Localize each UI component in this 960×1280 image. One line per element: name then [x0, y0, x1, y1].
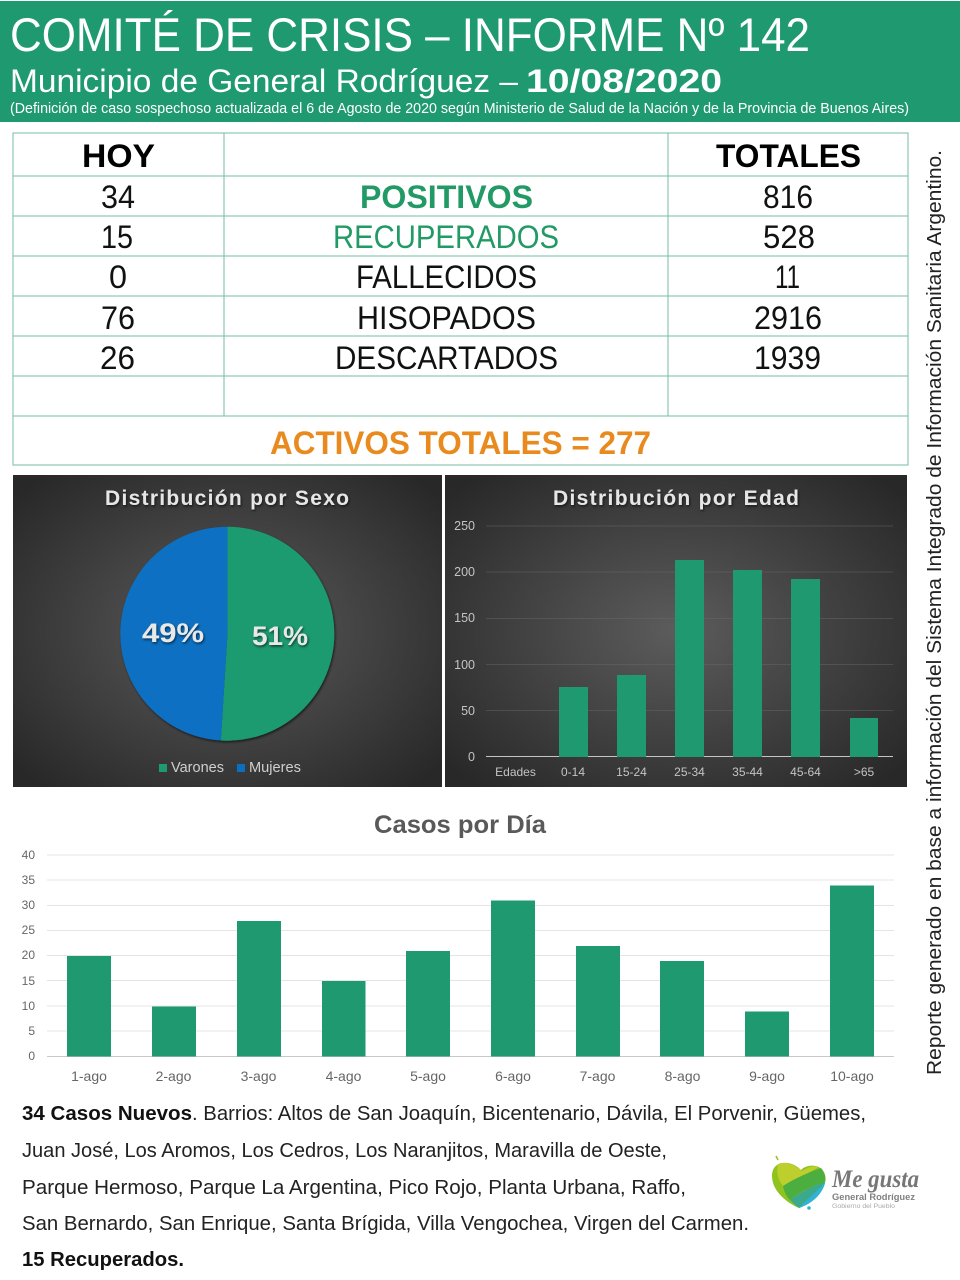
- bar chart: age: [454, 519, 893, 779]
- bar chart: daily cases: 2-ago: [156, 1068, 192, 1084]
- bar chart: daily cases: 4-ago: [326, 1068, 362, 1084]
- legend: Varones: [171, 760, 224, 776]
- bar chart: daily cases: 30: [22, 898, 35, 912]
- icon: heart: [772, 1156, 826, 1210]
- bar chart: age: 250: [454, 519, 475, 533]
- bar chart: daily cases: 40: [22, 848, 35, 862]
- pie chart: [120, 527, 334, 741]
- bar chart: age: >65: [854, 765, 875, 779]
- logo tagline: Gobierno del Pueblo: [832, 1204, 896, 1210]
- legend: Mujeres: [249, 760, 301, 776]
- summary table: [13, 133, 908, 465]
- row: descartados: 1939: [754, 340, 821, 376]
- bar chart: age: Edades: [495, 765, 536, 779]
- neighbourhoods text block: San Bernardo, San Enrique, Santa Brígida, Villa Vengochea, Virgen del Carmen.: [22, 1212, 749, 1235]
- row: positivos: 34: [101, 179, 135, 215]
- bar chart: daily cases: 9-ago: [749, 1068, 785, 1084]
- bar chart: daily cases: 10-ago: [830, 1068, 874, 1084]
- legend: [159, 760, 301, 776]
- row: hisopados: [101, 300, 822, 336]
- row: recuperados: RECUPERADOS: [333, 219, 559, 255]
- panel: distribution by sex: [13, 475, 442, 787]
- row: recuperados: 528: [763, 219, 815, 255]
- row: fallecidos: 11: [775, 259, 800, 295]
- heading: Distribución por Edad: [553, 487, 799, 510]
- heading: Distribución por Sexo: [105, 487, 349, 510]
- logo: Me gusta General Rodríguez: [772, 1156, 919, 1210]
- bar chart: age: 150: [454, 611, 475, 625]
- row: positivos: POSITIVOS: [360, 179, 533, 215]
- heading: Casos por Día: [374, 811, 547, 839]
- bar chart: age: 0: [468, 750, 475, 764]
- row: positivos: [101, 179, 813, 215]
- panel: cases per day: [22, 811, 894, 1084]
- bar chart: age: 100: [454, 658, 475, 672]
- bar chart: daily cases: 5-ago: [410, 1068, 446, 1084]
- header banner: [0, 1, 960, 122]
- report date: 10/08/2020: [526, 63, 722, 99]
- bar chart: daily cases: 3-ago: [241, 1068, 277, 1084]
- bar chart: daily cases: 7-ago: [580, 1068, 616, 1084]
- row: fallecidos: [109, 259, 800, 295]
- row: descartados: DESCARTADOS: [335, 340, 558, 376]
- neighbourhoods text block: Parque Hermoso, Parque La Argentina, Pico Rojo, Planta Urbana, Raffo,: [22, 1176, 686, 1199]
- row: fallecidos: 0: [109, 259, 127, 295]
- source note rotated: Reporte generado en base a información del Sistema Integrado de Información Sanitaria Argentino.: [924, 150, 946, 1075]
- bar chart: daily cases: 10: [22, 999, 35, 1013]
- bar chart: daily cases: [22, 848, 894, 1084]
- bar chart: age: 25-34: [674, 765, 705, 779]
- bar chart: age: 15-24: [616, 765, 647, 779]
- row: positivos: 816: [763, 179, 813, 215]
- bar chart: daily cases: 25: [22, 923, 35, 937]
- label: mujeres share: 49%: [142, 618, 204, 648]
- bar chart: daily cases: 20: [22, 948, 35, 962]
- bar chart: daily cases: 6-ago: [495, 1068, 531, 1084]
- row: hisopados: HISOPADOS: [357, 300, 536, 336]
- row: recuperados: [101, 219, 815, 255]
- row: fallecidos: FALLECIDOS: [356, 259, 537, 295]
- neighbourhoods text block: . Barrios: Altos de San Joaquín, Bicentenario, Dávila, El Porvenir, Güemes,: [192, 1102, 866, 1125]
- bar chart: age: 50: [461, 704, 475, 718]
- active cases total: ACTIVOS TOTALES = 277: [270, 425, 651, 461]
- title: COMITÉ DE CRISIS – INFORME Nº 142: [10, 8, 810, 61]
- bar chart: daily cases: 1-ago: [71, 1068, 107, 1084]
- logo wordmark: Me gusta: [831, 1166, 919, 1193]
- row: descartados: 26: [100, 340, 135, 376]
- bar chart: age: 45-64: [790, 765, 821, 779]
- row: hisopados: 76: [101, 300, 135, 336]
- bar chart: daily cases: 8-ago: [665, 1068, 701, 1084]
- neighbourhoods text block: 15 Recuperados.: [22, 1248, 184, 1271]
- column header: totales: TOTALES: [716, 138, 861, 174]
- bar chart: daily cases: 0: [28, 1049, 35, 1063]
- neighbourhoods text block: [22, 1102, 866, 1271]
- bar chart: age: 0-14: [561, 765, 585, 779]
- bar chart: daily cases: 5: [28, 1024, 35, 1038]
- panel: distribution by age: [445, 475, 907, 787]
- column header: hoy: HOY: [82, 138, 155, 174]
- neighbourhoods text block: 34 Casos Nuevos: [22, 1102, 192, 1125]
- bar chart: age: 35-44: [732, 765, 763, 779]
- bar chart: daily cases: 35: [22, 873, 35, 887]
- logo subtitle: General Rodríguez: [832, 1192, 915, 1203]
- row: hisopados: 2916: [754, 300, 822, 336]
- subtitle: Municipio de General Rodríguez –: [10, 63, 518, 99]
- bar chart: daily cases: 15: [22, 974, 35, 988]
- row: recuperados: 15: [101, 219, 133, 255]
- row: descartados: [100, 340, 821, 376]
- case definition note: (Definición de caso sospechoso actualizada el 6 de Agosto de 2020 según Ministerio de Salud de la Nación y de la Provincia de Buenos Aires): [10, 101, 909, 117]
- bar chart: age: 200: [454, 565, 475, 579]
- neighbourhoods text block: Juan José, Los Aromos, Los Cedros, Los Naranjitos, Maravilla de Oeste,: [22, 1139, 667, 1162]
- label: varones share: 51%: [252, 621, 308, 651]
